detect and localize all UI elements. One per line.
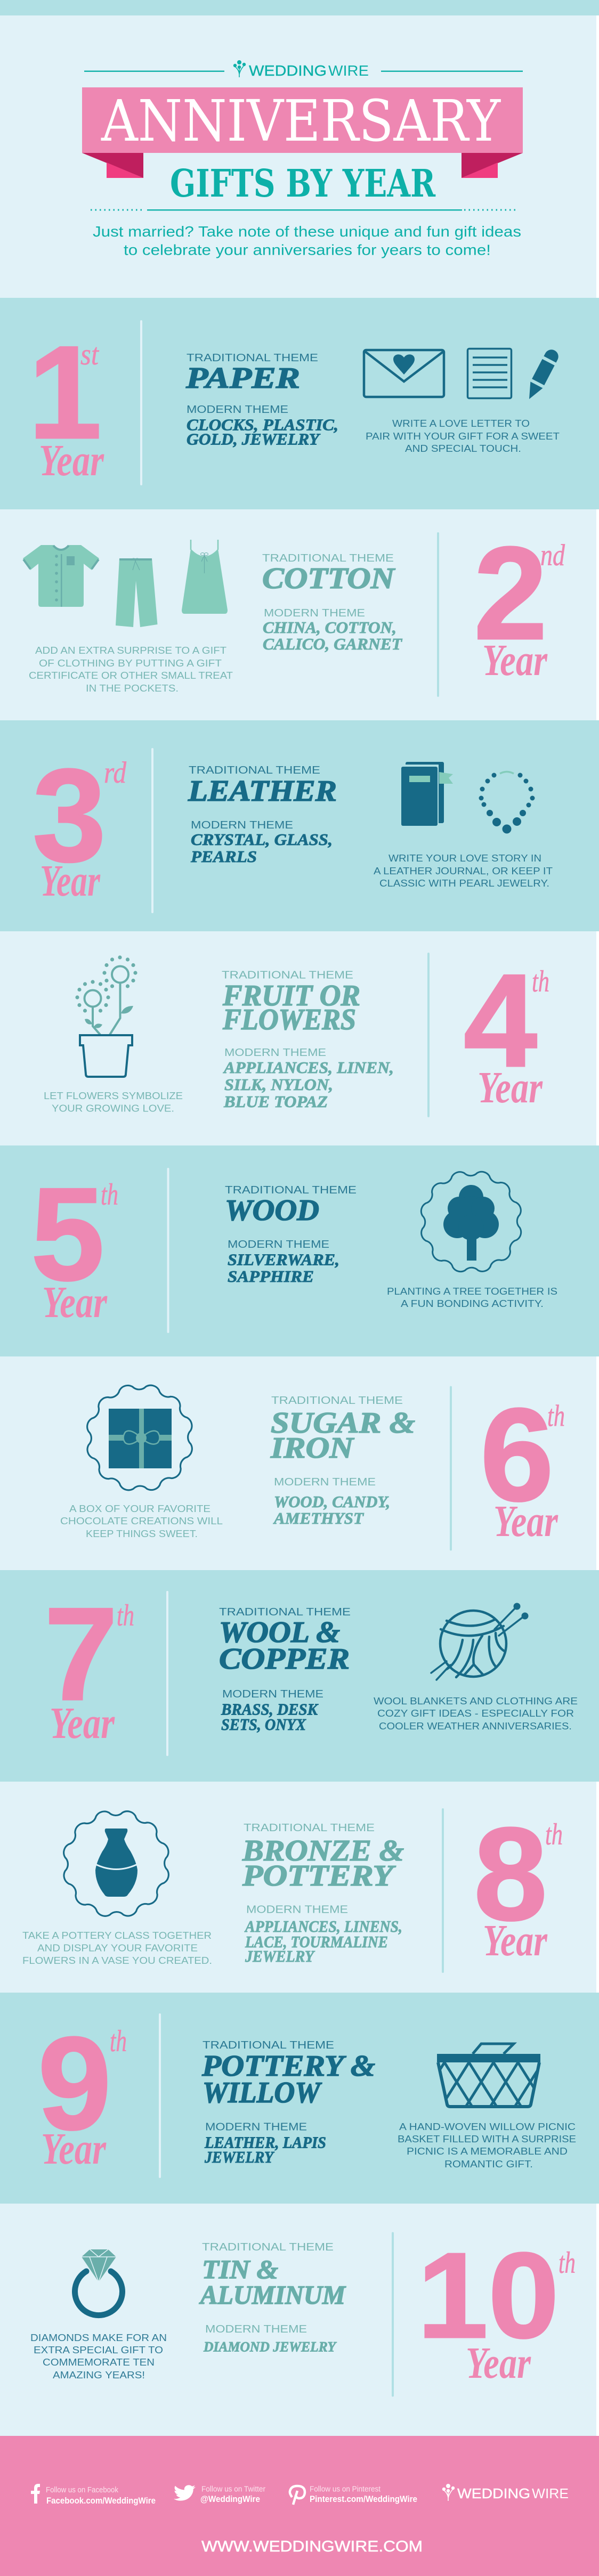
tip text xyxy=(374,1695,578,1732)
themes: sugar and iron xyxy=(270,1394,415,1527)
number: 8th year: Year xyxy=(483,1916,548,1965)
tip text: ADD AN EXTRA SURPRISE TO A GIFT xyxy=(35,645,226,656)
themes: cotton: CALICO, GARNET xyxy=(263,635,402,653)
tip text: AND SPECIAL TOUCH. xyxy=(405,443,521,454)
tip text: PICNIC IS A MEMORABLE AND xyxy=(407,2146,568,2157)
tip text: DIAMONDS MAKE FOR AN xyxy=(30,2332,167,2343)
tip text xyxy=(22,1930,212,1966)
number: 4th year: 4 xyxy=(464,946,537,1094)
number: 6th year: th xyxy=(547,1399,565,1433)
pinterest link: Pinterest.com/WeddingWire xyxy=(310,2494,417,2504)
themes: fruit or flowers: SILK, NYLON, xyxy=(224,1075,333,1094)
number: 6th year: Year xyxy=(493,1497,558,1546)
footer xyxy=(0,2436,599,2576)
logo: WeddingWire: WIRE xyxy=(328,62,369,79)
number: 10th year: th xyxy=(558,2246,576,2280)
number: 9th year: th xyxy=(110,2025,127,2058)
themes: pottery and willow: POTTERY & xyxy=(201,2050,375,2083)
tip text: BASKET FILLED WITH A SURPRISE xyxy=(398,2133,576,2144)
icon: love letter xyxy=(364,350,444,397)
number: 2nd year: Year xyxy=(482,636,548,685)
tip text: PAIR WITH YOUR GIFT FOR A SWEET xyxy=(366,430,560,442)
subtitle: Gifts by year: GIFTS BY YEAR xyxy=(170,161,436,206)
themes: leather: PEARLS xyxy=(190,847,257,866)
icon: vase badge xyxy=(56,1804,176,1923)
number: 1st year: Year xyxy=(39,436,104,485)
logo: WeddingWire: WEDDING xyxy=(249,62,327,79)
icon: leather journal xyxy=(401,762,453,826)
number: 7th year: Year xyxy=(50,1699,115,1748)
number: 5th year: th xyxy=(101,1178,118,1212)
themes: sugar and iron: AMETHYST xyxy=(273,1509,364,1527)
pinterest link: Follow us on Pinterest xyxy=(310,2485,381,2493)
themes: tin and aluminum: TIN & xyxy=(202,2254,278,2284)
themes: pottery and willow: WILLOW xyxy=(203,2076,322,2109)
tip text: AMAZING YEARS! xyxy=(53,2369,145,2380)
themes: leather: LEATHER xyxy=(188,775,337,808)
themes: wool and copper: COPPER xyxy=(219,1643,350,1676)
number: 10th year: Year xyxy=(466,2338,531,2388)
themes: wool and copper: MODERN THEME xyxy=(222,1688,323,1700)
number: 9th year: 9 xyxy=(38,2009,111,2157)
themes: leather: CRYSTAL, GLASS, xyxy=(191,830,333,849)
themes: wool and copper: SETS, ONYX xyxy=(221,1715,306,1734)
themes: leather: MODERN THEME xyxy=(191,819,293,831)
themes: sugar and iron: MODERN THEME xyxy=(274,1476,376,1488)
icon: pinterest xyxy=(290,2486,305,2505)
themes: wood: SILVERWARE, xyxy=(228,1250,339,1269)
panel: year 7 xyxy=(0,1570,599,1782)
number: 7th year: 7 xyxy=(44,1580,118,1728)
icon: shirt xyxy=(23,545,99,607)
tip text xyxy=(44,1090,183,1114)
tip text: LET FLOWERS SYMBOLIZE xyxy=(44,1090,183,1101)
themes: bronze and pottery: POTTERY xyxy=(242,1859,396,1892)
ribbon banner xyxy=(82,87,523,178)
themes: paper: TRADITIONAL THEME xyxy=(187,352,318,364)
number: 9th year: Year xyxy=(41,2124,107,2174)
themes: sugar and iron: TRADITIONAL THEME xyxy=(271,1394,403,1407)
themes: bronze and pottery: MODERN THEME xyxy=(246,1903,348,1916)
icon: pencil xyxy=(523,347,561,402)
themes: fruit or flowers: BLUE TOPAZ xyxy=(223,1092,328,1111)
themes: tin and aluminum: DIAMOND JEWELRY xyxy=(203,2339,337,2355)
number: 1st year: 1 xyxy=(28,318,102,466)
pinterest link xyxy=(310,2485,417,2504)
tip text: CERTIFICATE OR OTHER SMALL TREAT xyxy=(29,670,233,681)
logo: WeddingWire xyxy=(84,60,523,79)
tip text: EXTRA SPECIAL GIFT TO xyxy=(34,2344,163,2355)
number: 3rd year: Year xyxy=(40,856,101,906)
tip text: A BOX OF YOUR FAVORITE xyxy=(69,1503,211,1514)
tip text: YOUR GROWING LOVE. xyxy=(52,1103,174,1114)
themes: fruit or flowers xyxy=(222,969,394,1111)
themes: cotton xyxy=(262,552,402,653)
tip text: WRITE YOUR LOVE STORY IN xyxy=(388,852,541,864)
themes: bronze and pottery: JEWELRY xyxy=(245,1947,315,1965)
tip text: PLANTING A TREE TOGETHER IS xyxy=(387,1286,557,1297)
themes: cotton: TRADITIONAL THEME xyxy=(262,552,394,564)
tip text: COZY GIFT IDEAS - ESPECIALLY FOR xyxy=(377,1708,574,1719)
themes: tin and aluminum: ALUMINUM xyxy=(199,2280,346,2310)
number: 3rd year: 3 xyxy=(33,741,106,889)
tip text xyxy=(387,1286,557,1309)
themes: sugar and iron: IRON xyxy=(270,1432,355,1465)
number: 8th year: th xyxy=(545,1818,563,1851)
themes: cotton: CHINA, COTTON, xyxy=(263,618,396,637)
tip text: WRITE A LOVE LETTER TO xyxy=(392,418,530,429)
tip text xyxy=(398,2121,576,2169)
themes: bronze and pottery xyxy=(242,1822,404,1965)
themes: cotton: MODERN THEME xyxy=(264,607,365,619)
number: 2nd year: nd xyxy=(540,539,565,572)
icon: diamond ring xyxy=(75,2249,122,2315)
tip text: FLOWERS IN A VASE YOU CREATED. xyxy=(22,1955,212,1966)
themes: pottery and willow xyxy=(201,2039,375,2166)
logo: WeddingWire white: WEDDING xyxy=(457,2486,530,2501)
panel: year 4 xyxy=(44,946,549,1117)
tip text: CHOCOLATE CREATIONS WILL xyxy=(60,1515,223,1526)
tip text: WOOL BLANKETS AND CLOTHING ARE xyxy=(374,1695,578,1707)
tip text: A FUN BONDING ACTIVITY. xyxy=(401,1298,544,1309)
themes: fruit or flowers: APPLIANCES, LINEN, xyxy=(223,1058,394,1077)
tip text: COMMEMORATE TEN xyxy=(43,2356,155,2368)
icon: twitter xyxy=(174,2485,196,2501)
themes: fruit or flowers: MODERN THEME xyxy=(224,1046,326,1059)
themes: tin and aluminum xyxy=(199,2241,346,2355)
tip text: ROMANTIC GIFT. xyxy=(444,2158,533,2169)
themes: bronze and pottery: TRADITIONAL THEME xyxy=(244,1822,375,1834)
themes: pottery and willow: JEWELRY xyxy=(204,2148,275,2166)
dotted rule xyxy=(91,209,517,210)
panel: year 8 xyxy=(22,1800,563,1973)
themes: cotton: COTTON xyxy=(262,562,396,595)
facebook link: Facebook.com/WeddingWire xyxy=(46,2496,156,2506)
intro text: Just married? Take note of these unique and fun gift ideas xyxy=(93,223,521,240)
themes: wood: SAPPHIRE xyxy=(228,1267,314,1286)
twitter link: Follow us on Twitter xyxy=(201,2485,265,2493)
number: 5th year: Year xyxy=(42,1278,108,1327)
panel: year 9 xyxy=(0,1993,599,2204)
number: 2nd year: 2 xyxy=(474,519,547,667)
panel: year 1 xyxy=(0,298,599,509)
panel: year 6 xyxy=(60,1378,565,1550)
icon: potted flowers xyxy=(75,955,137,1077)
icon: yarn and needles xyxy=(431,1603,529,1680)
number: 3rd year: rd xyxy=(104,756,126,790)
themes: wood: WOOD xyxy=(225,1194,319,1227)
themes: leather: TRADITIONAL THEME xyxy=(189,764,320,776)
themes: sugar and iron: SUGAR & xyxy=(271,1407,415,1440)
number: 1st year: st xyxy=(80,338,99,371)
icon: nightgown xyxy=(182,540,228,614)
panel: year 3 xyxy=(0,720,599,931)
themes: paper: PAPER xyxy=(185,362,300,395)
panel: year 5 xyxy=(0,1145,599,1356)
themes: pottery and willow: LEATHER, LAPIS xyxy=(204,2133,326,2152)
themes: bronze and pottery: LACE, TOURMALINE xyxy=(245,1932,388,1951)
icon: gift box badge xyxy=(80,1378,199,1497)
tip text: KEEP THINGS SWEET. xyxy=(86,1528,198,1539)
themes: tin and aluminum: TRADITIONAL THEME xyxy=(202,2241,334,2253)
tip text: OF CLOTHING BY PUTTING A GIFT xyxy=(39,657,222,669)
icon: pants xyxy=(116,558,158,627)
tip text xyxy=(29,645,233,694)
themes: wool and copper: WOOL & xyxy=(219,1616,340,1649)
number: 6th year: 6 xyxy=(480,1380,554,1529)
header xyxy=(82,60,523,258)
number: 10th year: 10 xyxy=(417,2228,559,2363)
tip text: AND DISPLAY YOUR FAVORITE xyxy=(37,1943,198,1953)
number: 4th year: th xyxy=(532,965,549,998)
intro text: to celebrate your anniversaries for years to come! xyxy=(124,242,491,258)
tip text: TAKE A POTTERY CLASS TOGETHER xyxy=(22,1930,212,1941)
icon: tree badge xyxy=(415,1165,528,1278)
themes: bronze and pottery: APPLIANCES, LINENS, xyxy=(244,1917,402,1936)
tip text xyxy=(374,852,553,889)
number: 8th year: 8 xyxy=(474,1800,547,1948)
logo: WeddingWire white xyxy=(442,2484,569,2501)
themes: wool and copper: TRADITIONAL THEME xyxy=(219,1606,351,1618)
themes: wool and copper xyxy=(219,1606,351,1734)
themes: sugar and iron: WOOD, CANDY, xyxy=(274,1492,390,1511)
themes: paper xyxy=(185,352,338,449)
tip text: IN THE POCKETS. xyxy=(86,682,179,694)
icon: picnic basket xyxy=(436,2043,541,2108)
twitter link: @WeddingWire xyxy=(200,2494,260,2504)
themes: pottery and willow: TRADITIONAL THEME xyxy=(203,2039,334,2051)
themes: wood: TRADITIONAL THEME xyxy=(225,1184,357,1196)
themes: pottery and willow: MODERN THEME xyxy=(205,2120,307,2133)
icon: facebook xyxy=(31,2484,40,2504)
tip text: COOLER WEATHER ANNIVERSARIES. xyxy=(379,1720,572,1732)
tip text: A LEATHER JOURNAL, OR KEEP IT xyxy=(374,865,553,876)
tip text: A HAND-WOVEN WILLOW PICNIC xyxy=(399,2121,576,2132)
facebook link xyxy=(46,2485,156,2506)
intro text xyxy=(93,223,521,258)
number: 7th year: th xyxy=(117,1599,134,1632)
themes: tin and aluminum: MODERN THEME xyxy=(205,2323,307,2335)
tip text xyxy=(60,1503,223,1539)
themes: wood: MODERN THEME xyxy=(228,1238,329,1250)
panel: year 2 xyxy=(23,519,565,697)
themes: fruit or flowers: FRUIT OR xyxy=(222,979,360,1012)
panel: year 10 xyxy=(30,2228,576,2396)
themes: bronze and pottery: BRONZE & xyxy=(242,1834,404,1867)
logo: WeddingWire white: WIRE xyxy=(532,2486,569,2501)
number: 5th year: 5 xyxy=(31,1160,104,1308)
icon: pearl necklace xyxy=(479,771,535,833)
tip text xyxy=(366,418,560,454)
twitter link xyxy=(200,2485,265,2504)
themes: fruit or flowers: TRADITIONAL THEME xyxy=(222,969,353,981)
themes: paper: GOLD, JEWELRY xyxy=(187,429,321,449)
themes: wood xyxy=(225,1184,357,1286)
themes: leather xyxy=(188,764,337,866)
tip text xyxy=(30,2332,167,2380)
facebook link: Follow us on Facebook xyxy=(46,2485,118,2494)
themes: paper: CLOCKS, PLASTIC, xyxy=(187,415,338,434)
website url: WWW.WEDDINGWIRE.COM xyxy=(201,2538,423,2555)
themes: wool and copper: BRASS, DESK xyxy=(221,1700,319,1719)
tip text: CLASSIC WITH PEARL JEWELRY. xyxy=(379,877,549,889)
themes: fruit or flowers: FLOWERS xyxy=(222,1003,356,1036)
title: Anniversary: ANNIVERSARY xyxy=(101,88,501,155)
number: 4th year: Year xyxy=(477,1063,543,1112)
themes: paper: MODERN THEME xyxy=(187,403,288,416)
icon: paper sheet xyxy=(468,348,512,399)
